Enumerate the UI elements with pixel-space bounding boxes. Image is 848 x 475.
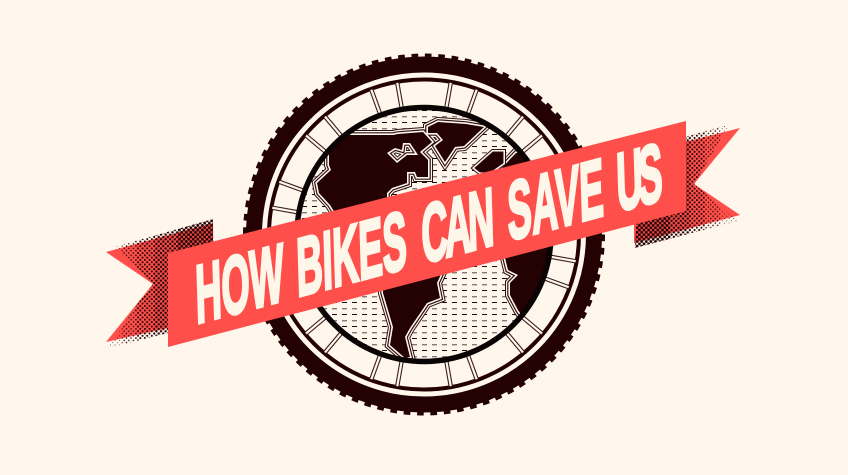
spokes [272, 83, 576, 386]
left ribbon tail with halftone shadow [106, 219, 214, 348]
title [194, 125, 664, 342]
right ribbon tail with halftone shadow [632, 118, 742, 250]
title: SAVE [506, 140, 605, 259]
title: CAN [420, 169, 496, 281]
ocean [302, 110, 516, 358]
tire tread knobs [246, 56, 602, 413]
continents with double outline [317, 122, 570, 358]
world map globe [297, 108, 570, 362]
title: US [615, 125, 664, 230]
title: HOW [194, 225, 285, 342]
title: BIKES [295, 193, 408, 315]
tire [254, 64, 594, 404]
main ribbon banner [168, 121, 686, 347]
rim [269, 80, 579, 390]
globe ring [297, 108, 551, 362]
bicycle wheel [246, 56, 602, 413]
